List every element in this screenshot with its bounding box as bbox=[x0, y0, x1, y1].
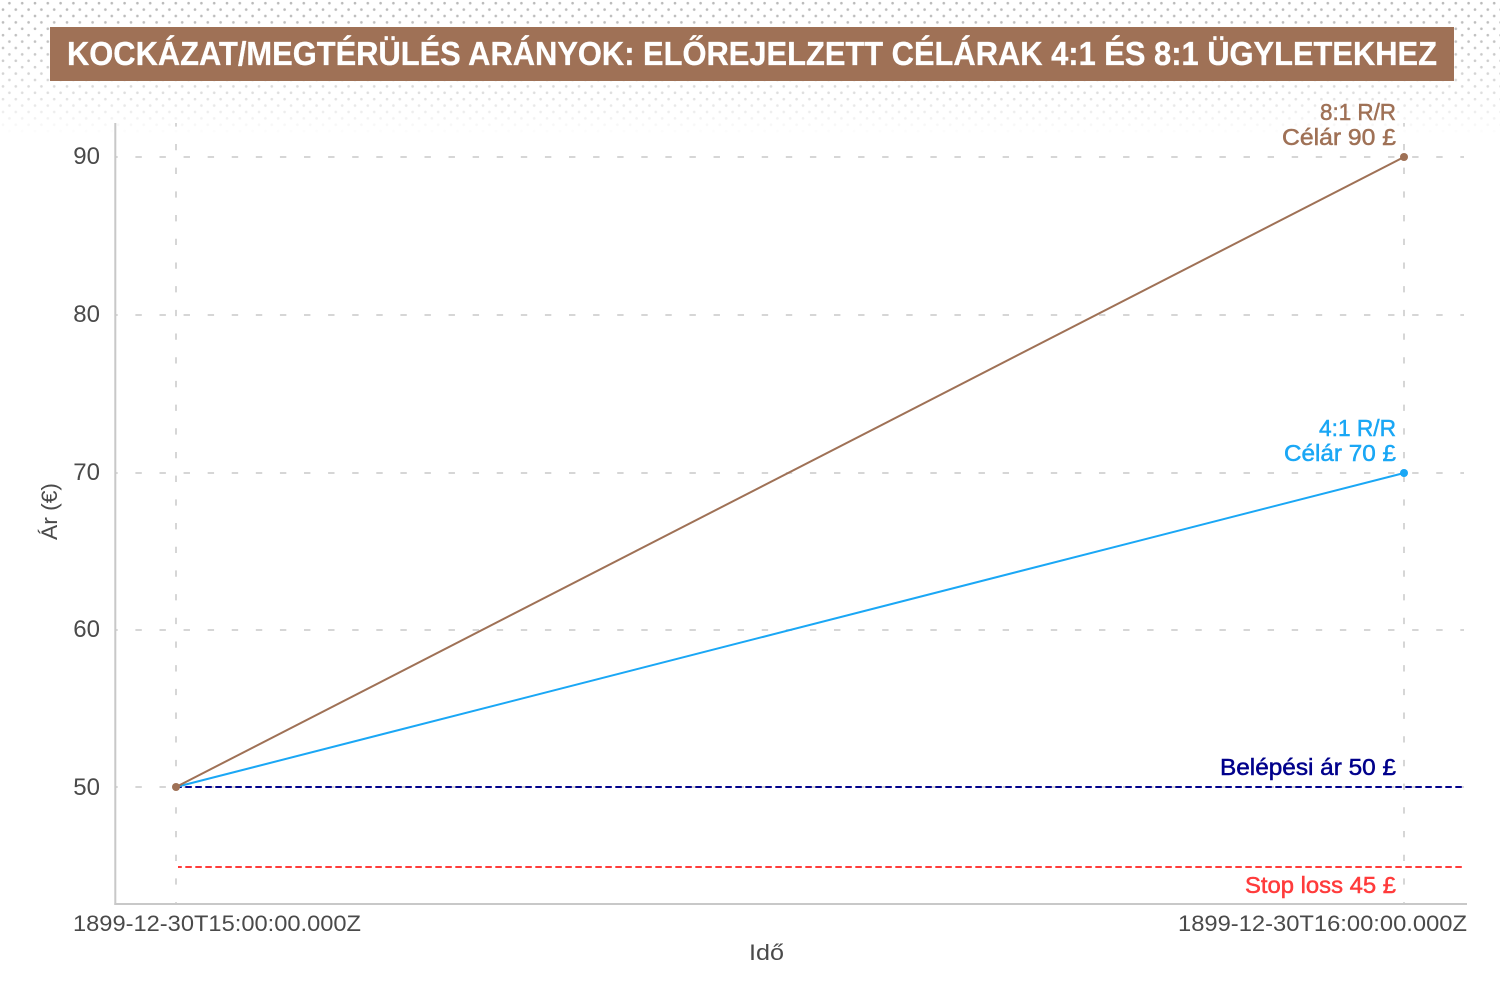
4:1 target line bbox=[176, 469, 1408, 787]
label: 8:1 target: 8:1 R/R bbox=[1320, 99, 1396, 125]
x axis tick labels: 1899-12-30T16:00:00.000Z bbox=[1178, 911, 1467, 936]
label: 4:1 target bbox=[1284, 415, 1396, 466]
y axis tick labels: 90 bbox=[73, 143, 100, 170]
label: stop loss: Stop loss 45 £ bbox=[1245, 872, 1396, 898]
x axis title: Idő bbox=[749, 940, 784, 965]
background dot pattern bbox=[0, 0, 1500, 136]
y axis tick labels: 50 bbox=[73, 774, 100, 801]
title banner: KOCKÁZAT/MEGTÉRÜLÉS ARÁNYOK: ELŐREJELZETT CÉLÁRAK 4:1 ÉS 8:1 ÜGYLETEKHEZ bbox=[67, 35, 1437, 72]
label: 8:1 target: Célár 90 £ bbox=[1282, 124, 1396, 150]
label: 4:1 target: Célár 70 £ bbox=[1284, 440, 1396, 466]
stop loss dashed line bbox=[178, 866, 1465, 868]
label: 4:1 target: 4:1 R/R bbox=[1319, 415, 1396, 441]
y axis title: Ár (€) bbox=[37, 483, 62, 540]
vertical grid lines bbox=[176, 123, 1404, 904]
label: 8:1 target bbox=[1282, 99, 1396, 150]
8:1 target line bbox=[172, 153, 1408, 791]
y axis tick labels: 80 bbox=[73, 301, 100, 328]
x axis line bbox=[114, 903, 1467, 905]
y axis tick labels: 70 bbox=[73, 459, 100, 486]
x axis tick labels: 1899-12-30T15:00:00.000Z bbox=[73, 911, 361, 936]
title banner bbox=[50, 27, 1454, 81]
x axis tick labels bbox=[73, 911, 1467, 936]
y axis line bbox=[114, 123, 116, 905]
horizontal grid lines bbox=[116, 157, 1464, 787]
entry price dashed line bbox=[176, 786, 1463, 788]
label: entry price: Belépési ár 50 £ bbox=[1220, 754, 1396, 780]
y axis tick labels bbox=[73, 143, 100, 801]
y axis tick labels: 60 bbox=[73, 616, 100, 643]
